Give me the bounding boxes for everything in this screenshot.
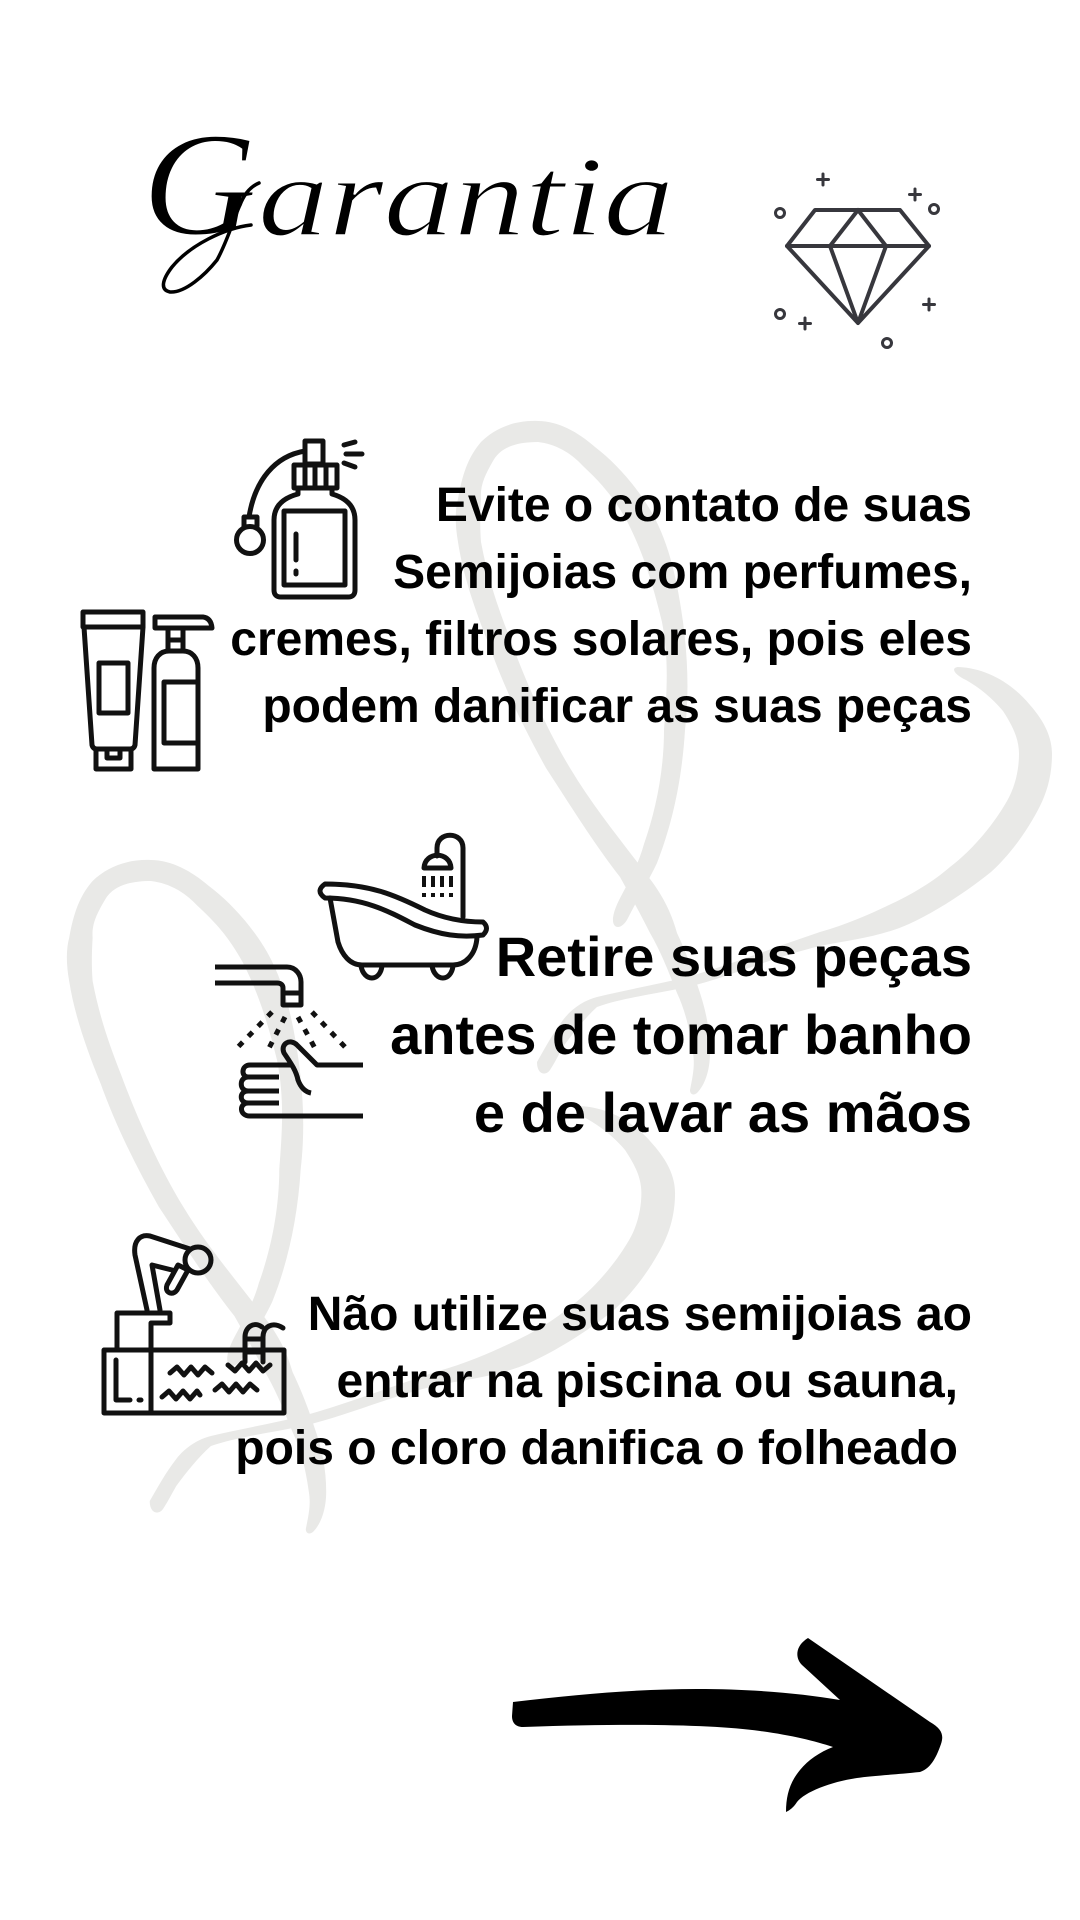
text block: remove before bath: antes de tomar banho: [390, 1003, 972, 1066]
text block: pool and sauna warning: Não utilize suas semijoias ao: [308, 1288, 972, 1341]
icon: bathtub with shower: [320, 835, 486, 978]
title: G: [142, 103, 257, 267]
text block: perfumes warning: Semijoias com perfumes,: [393, 546, 972, 599]
text block: remove before bath: e de lavar as mãos: [474, 1081, 972, 1144]
icon: diver and swimming pool: [104, 1236, 284, 1413]
text block: remove before bath: [390, 925, 972, 1144]
title: arantia: [258, 133, 674, 260]
icon: perfume bottle: [236, 441, 362, 597]
title: [142, 103, 674, 292]
text block: perfumes warning: cremes, filtros solares, pois eles: [230, 613, 972, 666]
text block: remove before bath: Retire suas peças: [496, 925, 972, 988]
text block: perfumes warning: [230, 479, 972, 733]
icon: cream tube and pump bottle: [83, 612, 212, 769]
text block: perfumes warning: podem danificar as suas peças: [262, 680, 972, 733]
text block: pool and sauna warning: pois o cloro danifica o folheado: [235, 1422, 958, 1475]
icon: diamond with sparkles: [776, 174, 938, 348]
text block: perfumes warning: Evite o contato de suas: [436, 479, 972, 532]
icon: hand washing under faucet: [215, 967, 363, 1116]
text block: pool and sauna warning: [235, 1288, 972, 1475]
text block: pool and sauna warning: entrar na piscina ou sauna,: [336, 1355, 958, 1408]
background: heart monogram watermark, upper: [456, 421, 1052, 1094]
background: heart monogram watermark, lower: [67, 860, 675, 1533]
arrow: [512, 1638, 942, 1812]
